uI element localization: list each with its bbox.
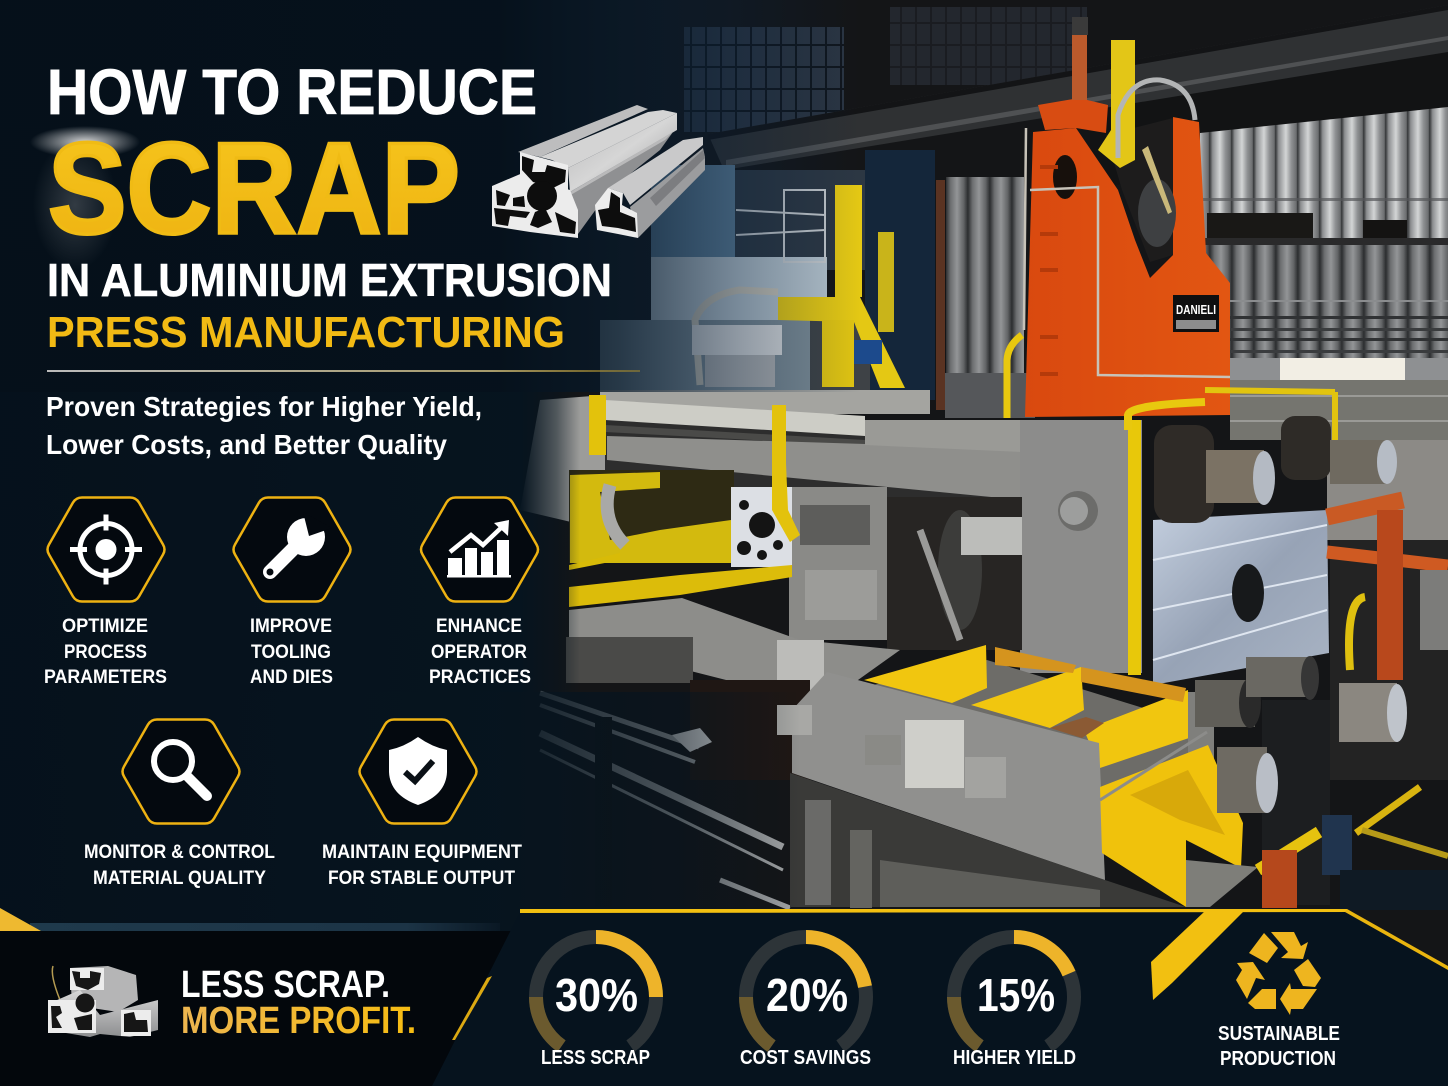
slogan: LESS SCRAP.	[181, 964, 390, 1006]
strategy: monitor and control material quality	[84, 720, 275, 889]
stat: 20% cost savings: COST SAVINGS	[740, 1047, 871, 1069]
title	[47, 56, 612, 357]
title line: press manufacturing: PRESS MANUFACTURING	[47, 308, 565, 357]
gauge	[746, 937, 866, 1046]
label: TOOLING	[251, 642, 331, 663]
label: PARAMETERS	[44, 667, 167, 688]
divider	[47, 370, 640, 372]
label	[250, 616, 333, 688]
bottom band: stats panel	[432, 909, 1448, 1086]
label: OPERATOR	[431, 642, 527, 663]
subtitle: Proven Strategies for Higher Yield,	[46, 391, 482, 422]
machine nameplate	[1173, 295, 1219, 332]
label: ENHANCE	[436, 616, 522, 637]
label	[44, 616, 167, 688]
stat: 15% higher yield	[953, 937, 1076, 1069]
subtitle	[46, 391, 482, 460]
stat: 15% higher yield: HIGHER YIELD	[953, 1047, 1076, 1069]
icon: target hexagon	[48, 498, 164, 602]
label: MAINTAIN EQUIPMENT	[322, 842, 522, 863]
label: OPTIMIZE	[62, 616, 148, 637]
stat: 30% less scrap: 30%	[555, 969, 638, 1021]
label: PROCESS	[64, 642, 147, 663]
label: AND DIES	[250, 667, 333, 688]
sustainable production: PRODUCTION	[1220, 1048, 1336, 1070]
title line: scrap: SCRAP	[48, 115, 460, 261]
icon: shield hexagon	[360, 720, 476, 824]
slogan: MORE PROFIT.	[181, 1000, 416, 1042]
label: PRACTICES	[429, 667, 531, 688]
label: MATERIAL QUALITY	[93, 868, 266, 889]
stat: 30% less scrap	[536, 937, 656, 1069]
icon: aluminium extrusion profiles	[492, 105, 705, 238]
icon: recycle arrows	[1236, 932, 1321, 1015]
strategy: enhance operator practices	[421, 498, 538, 688]
label	[84, 842, 275, 889]
machine nameplate: DANIELI	[1176, 302, 1216, 317]
subtitle: Lower Costs, and Better Quality	[46, 429, 447, 460]
bottom band: left panel	[0, 908, 520, 1086]
stat: 30% less scrap: LESS SCRAP	[541, 1047, 650, 1069]
label: MONITOR & CONTROL	[84, 842, 275, 863]
label: FOR STABLE OUTPUT	[328, 868, 515, 889]
strategy: maintain equipment	[322, 720, 522, 889]
icon: magnifier hexagon	[122, 720, 240, 824]
label: IMPROVE	[250, 616, 332, 637]
title line: in aluminium extrusion: IN ALUMINIUM EXTRUSION	[47, 254, 612, 306]
stat: 20% cost savings: 20%	[766, 969, 848, 1021]
label	[429, 616, 531, 688]
left navy overlay	[0, 0, 860, 932]
sustainable production	[1218, 932, 1340, 1070]
strategy: improve tooling and dies	[234, 498, 350, 688]
title line: how to reduce: HOW TO REDUCE	[47, 56, 537, 128]
stat: 15% higher yield: 15%	[977, 969, 1055, 1021]
icon: wrench hexagon	[234, 498, 350, 602]
gauge	[954, 937, 1074, 1046]
gauge	[536, 937, 656, 1046]
sustainable production: SUSTAINABLE	[1218, 1023, 1340, 1045]
icon: rising chart hexagon	[421, 498, 538, 602]
label	[322, 842, 522, 889]
stat: 20% cost savings	[740, 937, 871, 1069]
slogan	[181, 964, 416, 1042]
icon: extrusion pile	[48, 966, 158, 1037]
strategy: optimize process parameters	[44, 498, 167, 688]
